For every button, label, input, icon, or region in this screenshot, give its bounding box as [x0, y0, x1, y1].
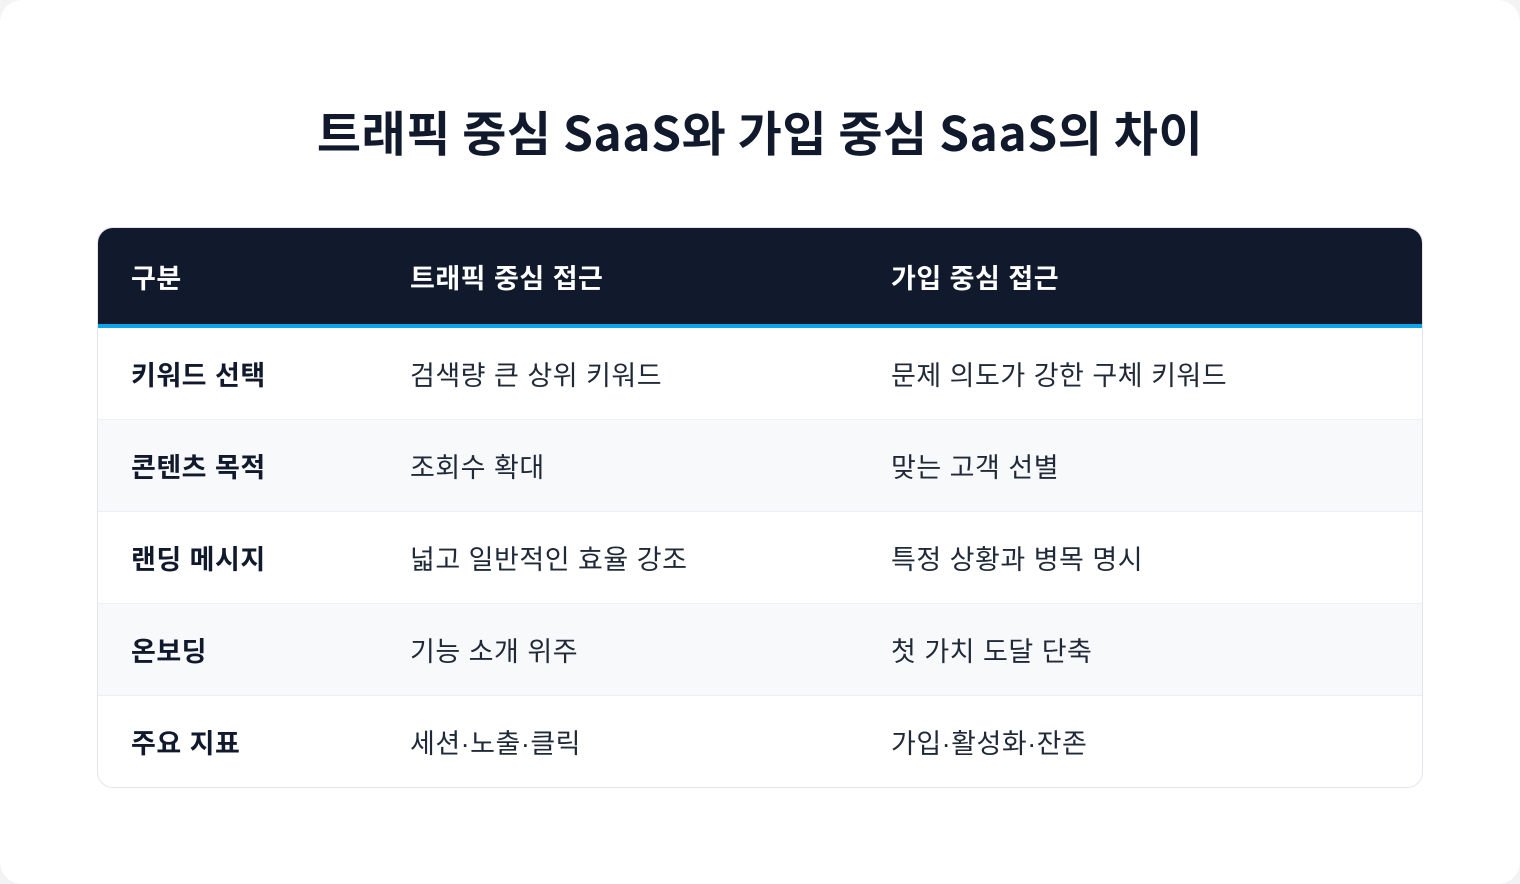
comparison table — [97, 227, 1423, 788]
table header: 가입 중심 접근 — [891, 264, 1059, 294]
row: content — [98, 419, 1422, 511]
table header — [98, 228, 1422, 328]
row: metrics — [98, 695, 1422, 787]
row: keyword: 문제 의도가 강한 구체 키워드 — [891, 361, 1227, 391]
row: landing — [98, 511, 1422, 603]
row: keyword — [131, 361, 1227, 391]
row: content: 맞는 고객 선별 — [891, 453, 1059, 483]
table header: 구분 — [131, 264, 182, 294]
row: content: 조회수 확대 — [410, 453, 545, 483]
row: onboarding: 첫 가치 도달 단축 — [891, 637, 1092, 667]
row: onboarding: 기능 소개 위주 — [410, 637, 578, 667]
table header: 트래픽 중심 접근 — [410, 264, 603, 294]
row: landing: 랜딩 메시지 — [131, 545, 266, 575]
row: content: 콘텐츠 목적 — [131, 453, 266, 483]
row: metrics: 세션·노출·클릭 — [410, 729, 581, 759]
row: landing: 특정 상황과 병목 명시 — [891, 545, 1143, 575]
row: onboarding: 온보딩 — [131, 637, 207, 667]
row: landing: 넓고 일반적인 효율 강조 — [410, 545, 687, 575]
row: metrics: 가입·활성화·잔존 — [891, 729, 1087, 759]
title: 트래픽 중심 SaaS와 가입 중심 SaaS의 차이 — [317, 95, 1203, 165]
row: keyword: 검색량 큰 상위 키워드 — [410, 361, 662, 391]
row: metrics: 주요 지표 — [131, 729, 240, 759]
row: onboarding — [98, 603, 1422, 695]
row: keyword: 키워드 선택 — [131, 361, 266, 391]
